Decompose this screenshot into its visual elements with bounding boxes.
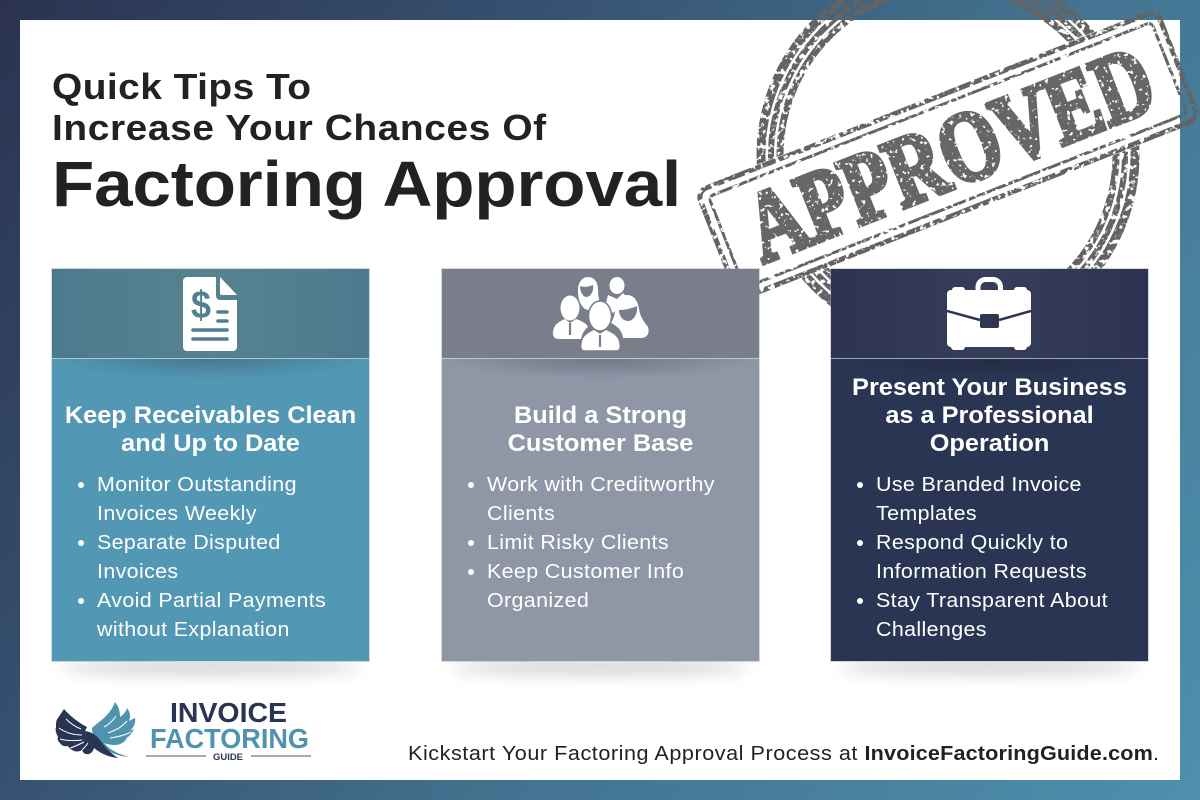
panel header <box>442 269 759 359</box>
heading: and Up to Date <box>121 430 300 457</box>
bullet list: Templates <box>876 502 977 525</box>
title: Increase Your Chances Of <box>52 107 547 148</box>
bullet list: Monitor Outstanding <box>97 473 297 496</box>
wordmark: GUIDE <box>213 752 243 763</box>
title: Factoring Approval <box>52 148 681 220</box>
title <box>52 66 681 220</box>
bullet list: Separate Disputed <box>97 531 281 554</box>
bullet list: Limit Risky Clients <box>487 531 669 554</box>
panel: keep receivables clean <box>52 269 369 661</box>
heading: Operation <box>930 430 1049 457</box>
bullet list: Invoices <box>97 560 179 583</box>
bullet list <box>857 473 1108 641</box>
icon: briefcase <box>947 277 1031 350</box>
logo: invoice factoring guide <box>56 697 311 763</box>
bullet list: Invoices Weekly <box>97 502 257 525</box>
bullet list <box>78 473 326 641</box>
icon: invoice document <box>183 277 237 351</box>
icon: eagle wings <box>56 702 135 758</box>
heading: as a Professional <box>885 402 1094 429</box>
bullet list: Organized <box>487 589 589 612</box>
bullet list <box>468 473 715 612</box>
bullet list: Keep Customer Info <box>487 560 684 583</box>
bullet list: Information Requests <box>876 560 1087 583</box>
panel: build a strong customer base <box>442 269 759 661</box>
bullet list: Respond Quickly to <box>876 531 1068 554</box>
bullet list: Challenges <box>876 618 987 641</box>
bullet list: without Explanation <box>97 618 290 641</box>
call to action: Kickstart Your Factoring Approval Process at InvoiceFactoringGuide.com. <box>408 743 1160 765</box>
panel: present your business <box>831 269 1148 661</box>
icon: invoice document: $ <box>191 284 211 327</box>
panel body <box>52 359 369 661</box>
heading <box>852 374 1127 457</box>
bullet list: Use Branded Invoice <box>876 473 1082 496</box>
heading: Keep Receivables Clean <box>65 402 356 429</box>
wordmark: FACTORING <box>150 723 309 754</box>
heading: Build a Strong <box>514 402 687 429</box>
wordmark <box>150 697 309 763</box>
panel body <box>442 359 759 661</box>
bullet list: Clients <box>487 502 555 525</box>
icon: group of people <box>553 277 649 350</box>
heading <box>65 402 356 457</box>
title: Quick Tips To <box>52 66 312 107</box>
bullet list: Avoid Partial Payments <box>97 589 326 612</box>
bullet list: Work with Creditworthy <box>487 473 715 496</box>
bullet list: Stay Transparent About <box>876 589 1108 612</box>
panel body <box>831 359 1148 661</box>
heading: Present Your Business <box>852 374 1127 401</box>
panel header <box>831 269 1148 359</box>
panel header <box>52 269 369 359</box>
wordmark: INVOICE <box>170 697 287 728</box>
heading: Customer Base <box>508 430 693 457</box>
heading <box>508 402 693 457</box>
